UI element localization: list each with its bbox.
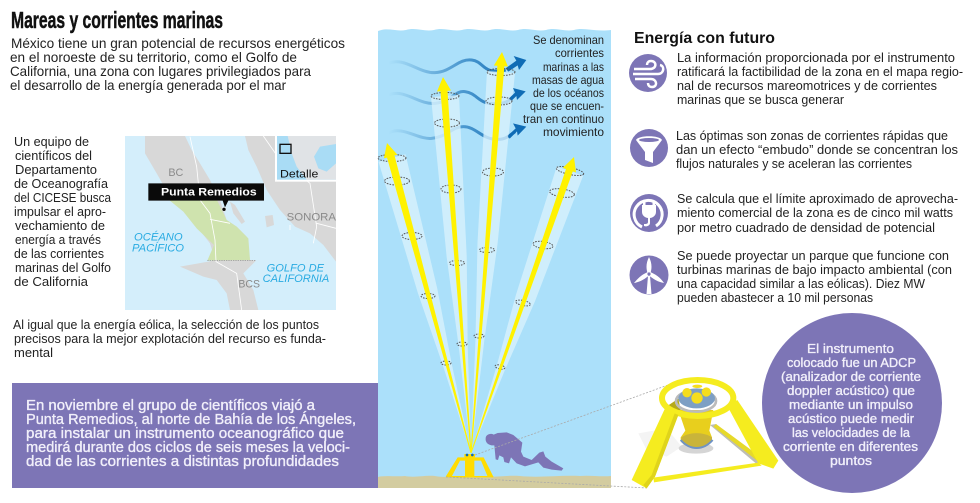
purple circle callout: ADCP: El instrumento [807,341,894,356]
text: regional map: marinas que se busca generar [677,93,845,107]
icon: wind turbine [630,256,668,294]
text: commercial limit: Se calcula que el límite aproximado de aprovecha- [677,192,958,206]
text block: wind comparison: precisos para la mejor explotación del recurso es funda- [14,332,326,346]
text: commercial limit: miento comercial de la zona es de cinco mil watts [677,206,953,220]
icon: funnel [630,129,668,167]
small instrument and diver [446,432,563,477]
panel: ocean diagram [378,29,611,488]
text: ocean currents definition: de los océanos [533,86,604,100]
text block: research team: Departamento [15,163,97,177]
intro text: en el noroeste de su territorio, como el Golfo de [10,50,297,65]
purple circle callout: ADCP: corriente en diferentes [783,439,918,454]
purple callout: expedition: Punta Remedios, al norte de Bahía de los Ángeles, [26,411,356,428]
text: commercial limit [677,192,958,235]
intro text: México tiene un gran potencial de recursos energéticos [11,36,345,51]
ocean current waves [388,60,515,139]
text block: research team: Un equipo de [14,135,89,149]
icon: plug [630,194,668,232]
text: regional map: ratificará la factibilidad de la zona en el mapa regio- [677,65,963,79]
map labels: CALIFORNIA [263,273,329,285]
purple circle callout: ADCP: doppler acústico) que [787,383,915,398]
purple callout: expedition: En noviembre el grupo de científicos viajó a [26,398,316,414]
instrument on sea floor [446,454,493,477]
purple circle callout: ADCP: las velocidades de la [792,425,911,440]
title: Mareas y corrientes marinas [11,7,223,33]
diver [486,432,563,471]
text block: wind comparison: mental [14,346,53,360]
dotted zoom lines [446,385,668,488]
text: funnel effect: flujos naturales y se aceleran las corrientes [676,157,912,171]
column [679,443,713,454]
purple circle callout: ADCP: puntos [830,453,872,468]
map labels: SONORA [287,212,337,224]
text: ocean currents definition: que se encuen- [530,99,604,113]
map label: Punta Remedios: Punta Remedios [161,187,257,199]
text block: research team: energía a través [15,233,101,247]
map labels: BCS [238,278,260,290]
yellow arrows [384,52,576,453]
ring and front legs [662,380,733,416]
map labels: GOLFO DE [267,262,325,274]
text: ocean currents definition: tran en continuo [523,112,604,126]
text: marine turbine park [677,249,952,305]
purple circle callout: ADCP [762,313,942,493]
text: ocean currents definition: corrientes [555,46,604,60]
map labels: PACÍFICO [132,242,184,255]
text block: research team: de Oceanografía [14,177,109,191]
purple callout: expedition: dad de las corrientes a distintas profundidades [26,454,339,470]
text block: wind comparison [13,318,326,360]
text block: research team: de California [14,275,89,289]
sonar beams [378,71,583,453]
icon: wind [629,54,667,92]
text: marine turbine park: Se puede proyectar un parque que funcione con [677,249,949,263]
text: ocean currents definition: masas de agua [532,73,604,87]
intro text [10,36,345,93]
intro text: el desarrollo de la energía generada por el mar [10,78,286,93]
sea floor [378,476,611,488]
purple circle callout: ADCP: mediante un impulso [789,397,913,412]
text: ocean currents definition: movimiento [543,125,604,139]
text block: research team: científicos del [15,149,92,163]
text: regional map: nal de recursos mareomotrices y de corrientes [677,79,937,93]
purple circle callout: ADCP: (analizador de corriente [781,369,921,384]
text block: wind comparison: Al igual que la energía eólica, la selección de los puntos [13,318,319,332]
purple callout: expedition: para instalar un instrumento oceanográfico que [26,426,344,442]
text: regional map [677,51,963,107]
heading: Energía con futuro: Energía con futuro [634,30,775,47]
map label: Punta Remedios [148,183,264,211]
illustration: ADCP instrument [632,380,778,488]
intro text: California, una zona con lugares privilegiados para [10,64,311,79]
text: marine turbine park: una capacidad similar a las eólicas). Diez MW [677,277,925,291]
text: commercial limit: por metro cuadrado de densidad de potencial [677,221,935,235]
purple callout: expedition: medirá durante dos ciclos de seis meses la veloci- [26,440,350,456]
text: funnel effect: Las óptimas son zonas de corrientes rápidas que [676,129,948,143]
map labels [132,167,337,290]
map inset: detalle: Detalle [280,169,318,181]
text: funnel effect [676,129,958,171]
text: regional map: La información proporcionada por el instrumento [677,51,955,65]
sensor head [676,390,716,412]
text block: research team: vechamiento de [15,219,105,233]
map inset: detalle [275,136,336,182]
text: marine turbine park: pueden abastecer a 10 mil personas [677,291,873,305]
current arrowheads [506,56,526,139]
text: ocean currents definition [523,33,604,139]
text: ocean currents definition: Se denominan [533,33,604,47]
back frame [710,424,760,464]
map labels: BC [168,167,184,179]
beam measurement rings [378,68,584,370]
text block: research team: marinas del Golfo [15,261,111,275]
text block: research team: de las corrientes [14,247,104,261]
text block: research team: del CICESE busca [14,191,112,205]
text block: research team: impulsar el apro- [14,205,106,219]
text: ocean currents definition: marinas a las [543,60,604,74]
text: funnel effect: dan un efecto “embudo” donde se concentran los [676,143,958,157]
text block: research team [14,135,112,289]
purple circle callout: ADCP: colocado fue un ADCP [787,355,916,370]
purple callout: expedition [12,383,378,488]
purple circle callout: ADCP: acústico puede medir [788,411,915,426]
text: marine turbine park: turbinas marinas de bajo impacto ambiental (con [677,263,952,277]
map: Golfo de California [125,136,337,310]
map labels: OCÉANO [134,231,183,244]
